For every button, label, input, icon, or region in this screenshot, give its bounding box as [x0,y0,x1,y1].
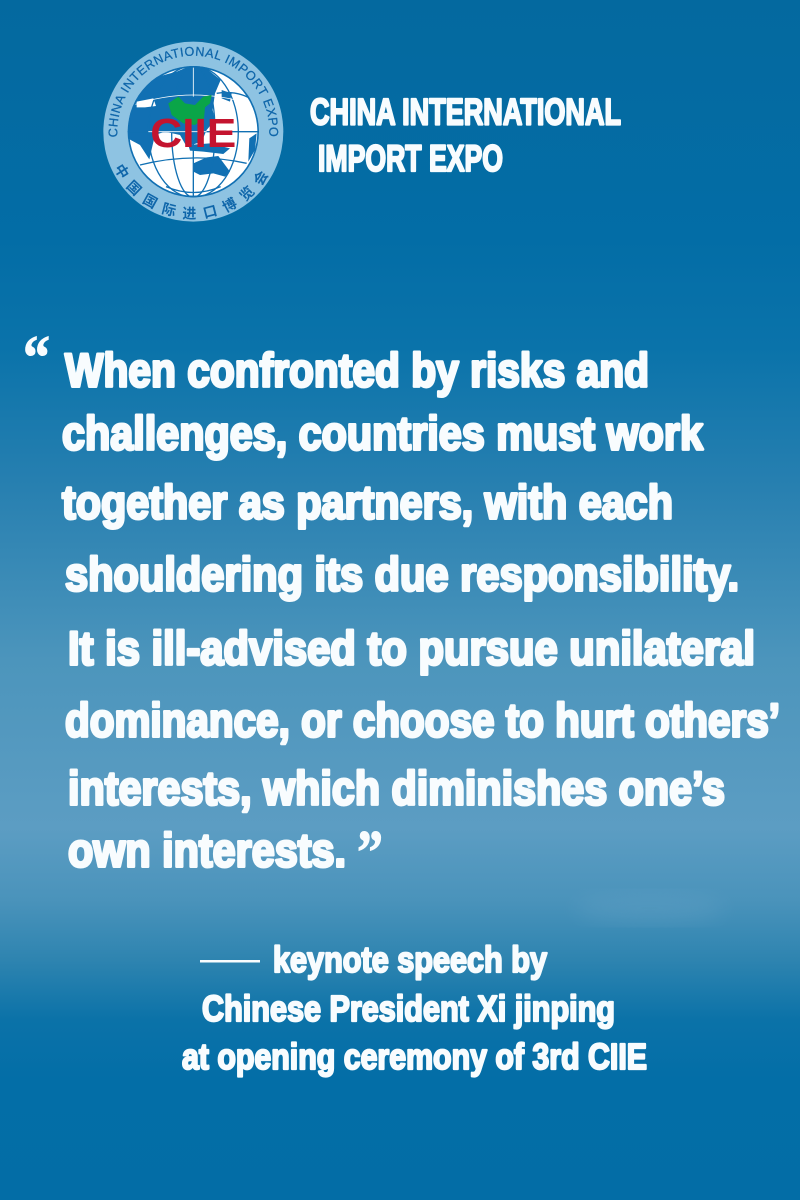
logo outer ring [103,42,283,222]
CIIE wordmark: CIIE [150,110,236,156]
main quote text: challenges, countries must work [62,408,703,460]
China map in green [168,95,212,125]
logo: CIIE globe emblem [103,42,284,222]
header line 2: IMPORT EXPO [318,138,503,179]
attribution [182,939,647,1077]
opening quotation mark: “ [23,324,50,392]
attribution: at opening ceremony of 3rd CIIE [182,1036,647,1077]
header title [310,92,621,179]
main quote text: When confronted by risks and [65,344,649,398]
main quote text: together as partners, with each [62,476,673,530]
logo text: English arc: CHINA INTERNATIONAL IMPORT EXPO [108,46,278,137]
globe [128,66,259,197]
header line 1: CHINA INTERNATIONAL [310,92,621,132]
logo text: Chinese arc: 中国国际进口博览会 [116,164,268,220]
main quote text: own interests. [68,824,346,878]
main quote text [62,344,780,878]
attribution: keynote speech by [273,939,547,980]
attribution dash [200,960,260,962]
cloud haze [575,892,725,924]
grid lines [128,66,259,197]
land masses [128,66,221,159]
closing quotation mark: ” [357,819,383,887]
attribution: Chinese President Xi jinping [202,988,615,1029]
